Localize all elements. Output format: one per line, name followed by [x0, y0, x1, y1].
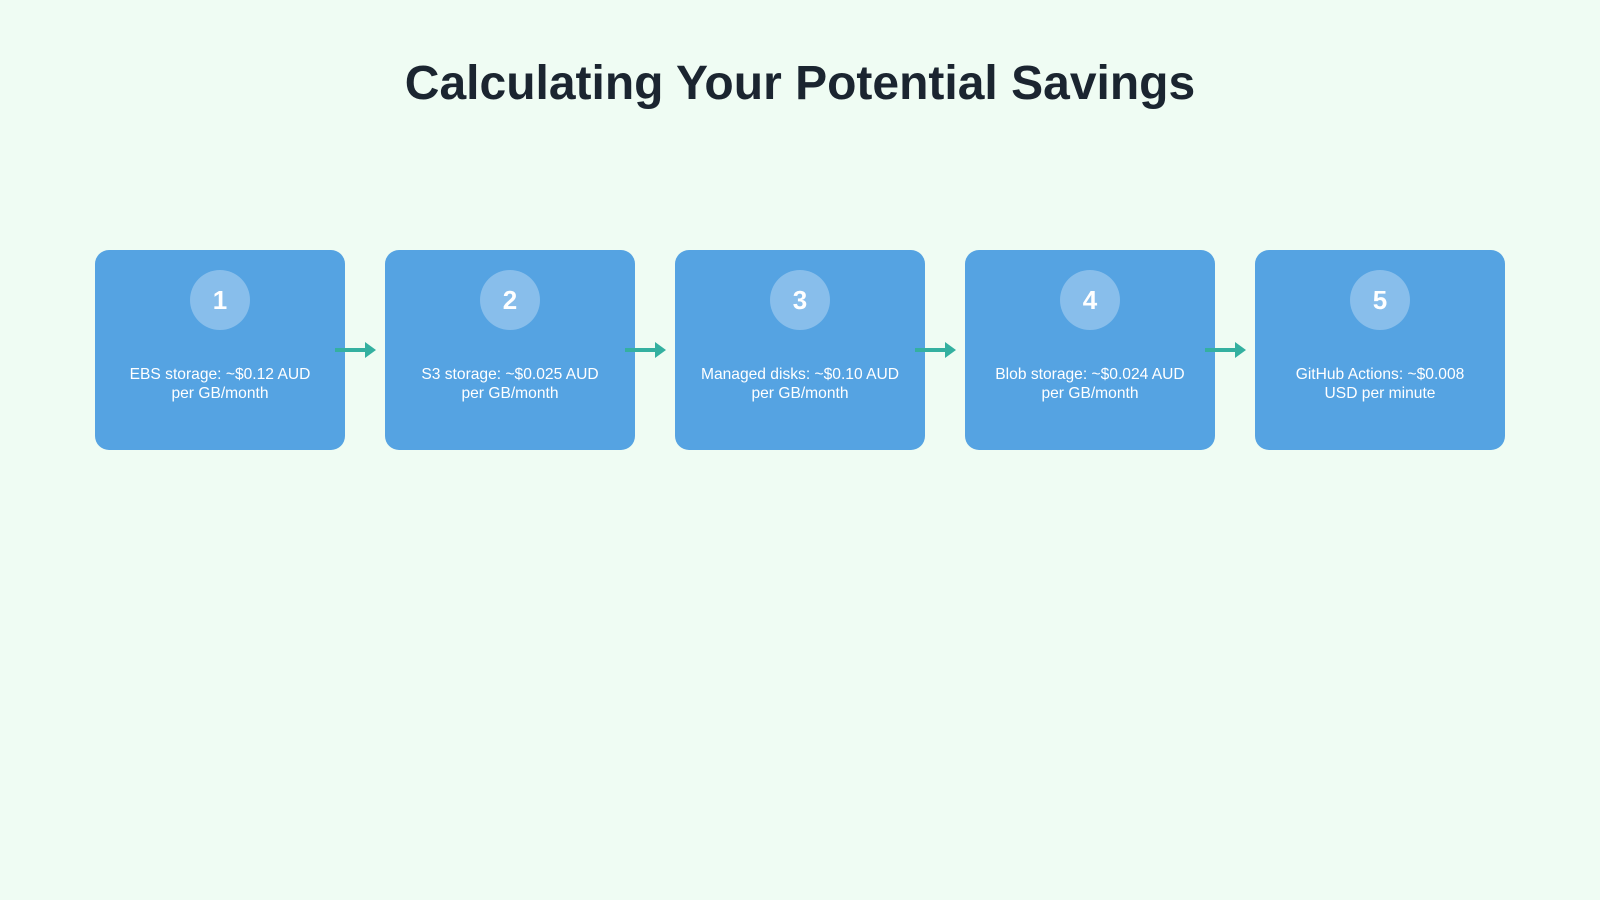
- arrow 4: [1205, 342, 1246, 358]
- step 3 card: [675, 250, 925, 450]
- step 2 number: 2: [503, 285, 517, 315]
- step 2 text: [421, 366, 599, 402]
- step 1 text: EBS storage: ~$0.12 AUD: [130, 366, 310, 383]
- step 5 card: [1255, 250, 1505, 450]
- step 5 number: [1350, 270, 1410, 330]
- step 4 number: 4: [1083, 285, 1097, 315]
- arrow 2: [625, 342, 666, 358]
- arrow 3: [915, 342, 956, 358]
- step 1 text: [130, 366, 310, 402]
- step 3 text: Managed disks: ~$0.10 AUD: [701, 366, 899, 383]
- step 5 text: USD per minute: [1325, 384, 1435, 402]
- step 1 number: 1: [213, 285, 227, 315]
- step 2 text: S3 storage: ~$0.025 AUD: [421, 366, 599, 383]
- title: Calculating Your Potential Savings: [405, 57, 1195, 110]
- step 3 number: [770, 270, 830, 330]
- step 4 text: per GB/month: [1041, 384, 1139, 402]
- step 4 number: [1060, 270, 1120, 330]
- step 2 card: [385, 250, 635, 450]
- step 4 text: Blob storage: ~$0.024 AUD: [995, 366, 1185, 383]
- step 5 text: [1296, 366, 1464, 402]
- step 5 number: 5: [1373, 285, 1387, 315]
- step 3 number: 3: [793, 285, 807, 315]
- step 5 text: GitHub Actions: ~$0.008: [1296, 366, 1464, 383]
- step 4 text: [995, 366, 1185, 402]
- step 2 text: per GB/month: [461, 384, 559, 402]
- step 1 number: [190, 270, 250, 330]
- step 3 text: per GB/month: [751, 384, 849, 402]
- step 4 card: [965, 250, 1215, 450]
- step 1 text: per GB/month: [171, 384, 269, 402]
- step 2 number: [480, 270, 540, 330]
- step 3 text: [701, 366, 899, 402]
- arrow 1: [335, 342, 376, 358]
- step 1 card: [95, 250, 345, 450]
